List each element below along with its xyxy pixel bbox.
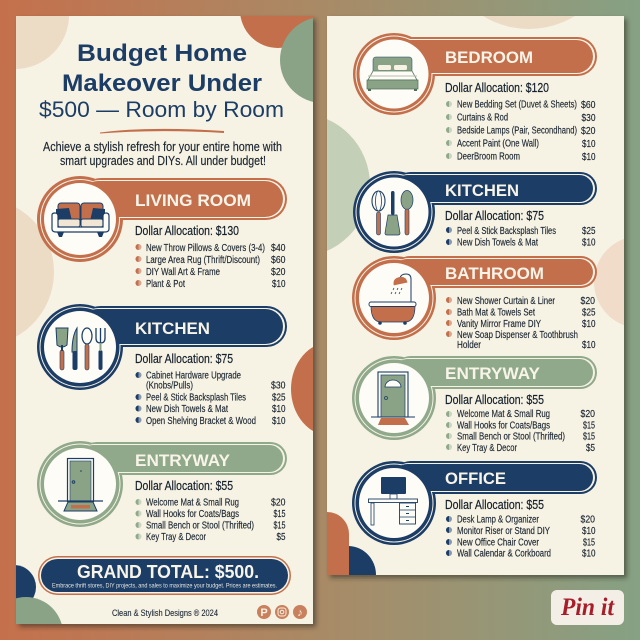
budget list: entryway: Small Bench or Stool (Thrifted) bbox=[146, 520, 254, 532]
budget list: office: Desk Lamp & Organizer bbox=[457, 514, 540, 526]
budget list: bedroom: Curtains & Rod bbox=[457, 112, 508, 124]
section: bathroom bbox=[352, 256, 597, 351]
icon: door with half-moon window bbox=[371, 372, 415, 425]
icon: utensils bbox=[56, 328, 105, 370]
social icons: P bbox=[260, 607, 268, 619]
budget list: bedroom: $10 bbox=[582, 151, 596, 163]
budget list: entryway: Small Bench or Stool (Thrifted) bbox=[457, 432, 565, 442]
dollar allocation: Dollar Allocation: $55 bbox=[445, 497, 544, 512]
budget list: entryway: $15 bbox=[583, 420, 595, 432]
section: bedroom bbox=[353, 33, 597, 163]
icon: whisk, spatula, spoon bbox=[372, 190, 413, 235]
heading: bedroom: BEDROOM bbox=[445, 49, 533, 67]
title: $500 — Room by Room bbox=[39, 97, 284, 122]
budget list: living room: Plant & Pot bbox=[146, 279, 185, 290]
heading: entryway: ENTRYWAY bbox=[135, 452, 230, 470]
budget list: entryway: $5 bbox=[276, 531, 286, 543]
dollar allocation: Dollar Allocation: $75 bbox=[445, 208, 544, 223]
budget list: entryway: Key Tray & Decor bbox=[457, 443, 518, 454]
budget list: bedroom: New Bedding Set (Duvet & Sheets) bbox=[457, 100, 577, 110]
title: Budget Home bbox=[77, 40, 247, 67]
budget list: living room: Large Area Rug (Thrift/Discount) bbox=[146, 255, 260, 266]
section: entryway bbox=[37, 441, 287, 543]
heading: office: OFFICE bbox=[445, 470, 506, 488]
heading: entryway: ENTRYWAY bbox=[445, 365, 540, 383]
budget list: office bbox=[446, 514, 596, 560]
budget list: entryway: Wall Hooks for Coats/Bags bbox=[457, 420, 550, 432]
budget list: entryway: Welcome Mat & Small Rug bbox=[146, 498, 239, 508]
icon: sofa bbox=[52, 203, 109, 237]
section: kitchen, right page bbox=[353, 171, 597, 253]
social icons: ♪ bbox=[297, 607, 303, 619]
budget list: bedroom: $20 bbox=[581, 125, 596, 137]
budget list: entryway bbox=[136, 496, 286, 543]
budget list: bedroom bbox=[446, 99, 596, 163]
budget list: kitchen: $10 bbox=[272, 403, 286, 415]
budget list: bedroom: $10 bbox=[582, 138, 596, 150]
footer credit: Clean & Stylish Designs ® 2024 bbox=[112, 608, 218, 619]
panel: right infographic page bbox=[327, 16, 630, 581]
budget list: living room: $40 bbox=[271, 242, 286, 254]
budget list: entryway bbox=[446, 408, 595, 454]
budget list: office: $10 bbox=[582, 548, 596, 560]
section: living room bbox=[37, 176, 287, 290]
budget list: living room: $60 bbox=[271, 254, 286, 266]
budget list: entryway: $15 bbox=[583, 430, 595, 442]
budget list: office: $20 bbox=[580, 514, 595, 526]
dollar allocation: Dollar Allocation: $75 bbox=[135, 351, 233, 366]
budget list: kitchen: $30 bbox=[271, 380, 286, 392]
heading: bathroom: BATHROOM bbox=[445, 265, 544, 283]
budget list: bathroom: New Soap Dispenser & Toothbrush bbox=[457, 330, 578, 341]
budget list: kitchen: $10 bbox=[582, 236, 596, 248]
budget list: office: Wall Calendar & Corkboard bbox=[457, 548, 551, 560]
budget list: entryway: $15 bbox=[274, 508, 286, 520]
budget list: bathroom: $25 bbox=[582, 306, 596, 318]
budget list: kitchen: Peel & Stick Backsplash Tiles bbox=[146, 392, 246, 404]
budget list: bathroom: $10 bbox=[582, 318, 596, 330]
budget list: bedroom: DeerBroom Room bbox=[457, 152, 520, 162]
budget list: bathroom: $10 bbox=[582, 339, 596, 351]
dollar allocation: Dollar Allocation: $55 bbox=[445, 392, 544, 407]
dollar allocation: Dollar Allocation: $120 bbox=[445, 80, 549, 95]
budget list: kitchen: (Knobs/Pulls) bbox=[146, 380, 193, 392]
intro text: Achieve a stylish refresh for your entire home with bbox=[43, 140, 282, 154]
icon: bathtub and shower bbox=[369, 274, 416, 325]
intro text bbox=[43, 140, 282, 168]
title underline bbox=[100, 129, 224, 134]
intro text: smart upgrades and DIYs. All under budget! bbox=[60, 154, 266, 168]
panel: left infographic page bbox=[16, 16, 319, 630]
budget list: bathroom: $20 bbox=[580, 295, 595, 307]
icon: door with mat bbox=[58, 458, 103, 511]
budget list: office: $15 bbox=[583, 536, 595, 548]
budget list: living room: DIY Wall Art & Frame bbox=[146, 267, 220, 278]
budget list: entryway: $20 bbox=[271, 496, 286, 508]
budget list: bedroom: $60 bbox=[581, 99, 596, 111]
budget list: bathroom: Holder bbox=[457, 340, 482, 351]
social icons bbox=[257, 605, 307, 619]
budget list: living room bbox=[136, 242, 286, 290]
budget list: kitchen: Peel & Stick Backsplash Tiles bbox=[457, 226, 556, 237]
budget list: kitchen: Cabinet Hardware Upgrade bbox=[146, 370, 241, 382]
budget list: entryway: $5 bbox=[586, 442, 595, 454]
budget list: kitchen: New Dish Towels & Mat bbox=[146, 404, 228, 415]
section: kitchen bbox=[37, 304, 287, 427]
budget list: entryway: Wall Hooks for Coats/Bags bbox=[146, 509, 239, 520]
budget list: bathroom: New Shower Curtain & Liner bbox=[457, 296, 556, 307]
budget list: living room: New Throw Pillows & Covers (3-4) bbox=[146, 243, 265, 254]
grand total banner: Embrace thrift stores, DIY projects, and sales to maximize your budget. Prices are estimates. bbox=[52, 582, 277, 590]
budget list: entryway: Key Tray & Decor bbox=[146, 532, 207, 543]
budget list: office: $10 bbox=[582, 525, 596, 537]
pin it badge bbox=[551, 590, 624, 625]
budget list: kitchen: $10 bbox=[272, 415, 286, 427]
budget list: bathroom: Bath Mat & Towels Set bbox=[457, 308, 535, 318]
budget list: bathroom bbox=[446, 295, 596, 351]
section: entryway, right page bbox=[352, 356, 597, 454]
budget list: office: Monitor Riser or Stand DIY bbox=[457, 526, 550, 537]
decorative background shapes, right page bbox=[327, 16, 624, 575]
dollar allocation: Dollar Allocation: $130 bbox=[135, 223, 239, 238]
budget list: kitchen bbox=[446, 225, 596, 248]
budget list: bathroom: Vanity Mirror Frame DIY bbox=[457, 319, 541, 330]
budget list: office: New Office Chair Cover bbox=[457, 538, 540, 548]
grand total banner bbox=[38, 556, 291, 595]
grand total banner: GRAND TOTAL: $500. bbox=[77, 561, 259, 582]
budget list: living room: $10 bbox=[272, 278, 286, 290]
budget list: bedroom: $30 bbox=[582, 112, 596, 124]
decorative background shapes, left page bbox=[16, 16, 313, 624]
heading: kitchen: KITCHEN bbox=[445, 182, 519, 200]
budget list: bedroom: Accent Paint (One Wall) bbox=[457, 138, 539, 150]
budget list: kitchen: $25 bbox=[582, 225, 596, 237]
budget list: kitchen: New Dish Towels & Mat bbox=[457, 238, 538, 248]
budget list: entryway: $15 bbox=[274, 520, 286, 532]
dollar allocation: Dollar Allocation: $55 bbox=[135, 478, 233, 493]
budget list: kitchen: $25 bbox=[272, 392, 286, 404]
budget list: bedroom: Bedside Lamps (Pair, Secondhand) bbox=[457, 126, 577, 136]
title bbox=[39, 40, 284, 122]
budget list: kitchen bbox=[136, 370, 286, 427]
budget list: entryway: Welcome Mat & Small Rug bbox=[457, 409, 550, 420]
icon: desk with monitor bbox=[368, 477, 418, 525]
icon: bed bbox=[367, 57, 418, 91]
pin it badge: Pin it bbox=[560, 594, 615, 621]
budget list: living room: $20 bbox=[271, 266, 286, 278]
heading: kitchen: KITCHEN bbox=[135, 320, 210, 338]
heading: living room: LIVING ROOM bbox=[135, 192, 251, 210]
title: Makeover Under bbox=[62, 70, 262, 97]
budget list: entryway: $20 bbox=[580, 408, 595, 420]
section: office bbox=[352, 461, 597, 560]
budget list: kitchen: Open Shelving Bracket & Wood bbox=[146, 416, 256, 427]
